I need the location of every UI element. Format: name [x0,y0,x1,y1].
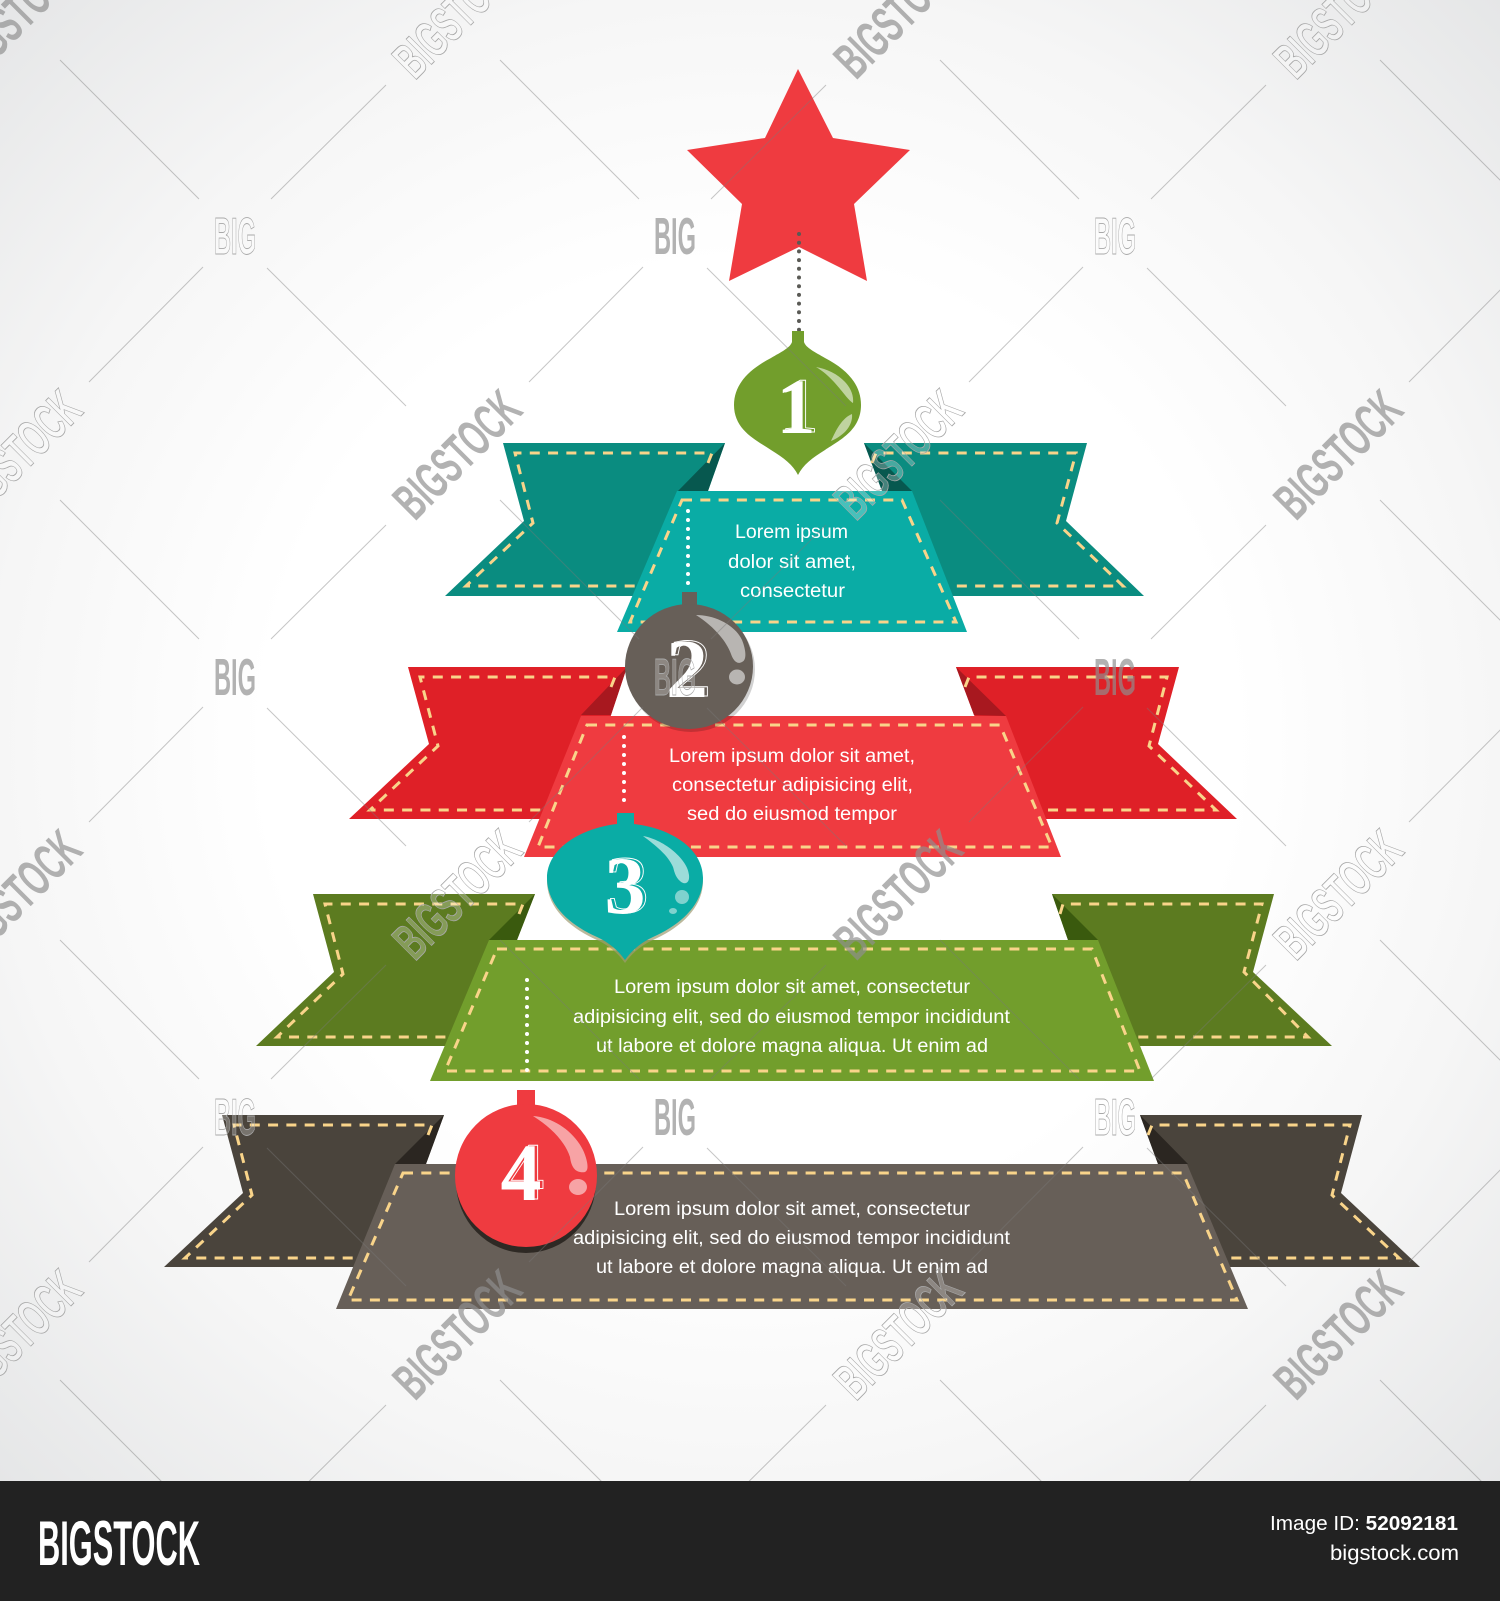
ribbon 3 right tail [1052,894,1332,1046]
ribbon 2 left tail [349,667,627,819]
watermark text: BIGSTOCK [823,1260,974,1410]
ribbon 2 right tail [956,667,1237,819]
ribbon 1 left tail [445,443,725,596]
ribbon 1 right tail [864,443,1144,596]
ornament 2: grey: 2 [669,622,711,715]
ribbon 4 centre panel: Lorem ipsum dolor sit amet, consectetur [614,1199,971,1220]
watermark text: BIG [214,1089,256,1147]
watermark text: BIGSTOCK [382,1260,533,1410]
watermark text: BIGSTOCK [382,820,533,970]
ribbon 3 left tail [256,894,535,1046]
ribbon 2 centre panel: Lorem ipsum dolor sit amet, [669,746,915,767]
ornament 2: grey [625,592,755,732]
ribbon 4 centre panel [336,1164,1248,1309]
ribbon 2 centre panel: sed do eiusmod tempor [687,804,898,825]
ribbon 1 centre panel [617,491,967,632]
watermark text: BIG [1094,1089,1136,1147]
ribbon 3 centre panel: Lorem ipsum dolor sit amet, consectetur [614,977,971,998]
watermark text: BIGSTOCK [823,380,974,530]
dotted string: star to ornament 1 [797,234,801,330]
footer bar: BIGSTOCK [38,1509,200,1579]
ribbon 2 centre panel [524,716,1061,857]
image id: Image ID: 52092181 [1270,1512,1458,1535]
ribbon 4 centre panel: ut labore et dolore magna aliqua. Ut enim ad [596,1257,988,1278]
ribbon 2: red [349,667,1237,857]
ribbon 1 centre panel: Lorem ipsum [735,522,848,543]
ribbon 3 centre panel [430,940,1154,1081]
watermark text: BIG [1094,208,1136,266]
ribbon 3 centre panel: adipisicing elit, sed do eiusmod tempor incididunt [573,1007,1011,1028]
ribbon 3: green [256,894,1332,1081]
ornament 1: green [734,331,861,475]
ornament 2: grey: 2 [666,623,708,716]
ribbon 4 right tail [1140,1115,1420,1267]
footer site name: bigstock.com [1330,1542,1459,1565]
watermark text: BIG [214,649,256,707]
star [687,69,910,281]
ornament 1: green: 1 [776,363,816,450]
ornament 3: teal: 3 [604,840,646,931]
ribbon 1 centre panel: dolor sit amet, [728,552,856,573]
watermark text: BIGSTOCK [382,380,533,530]
watermark text: BIGSTOCK [1263,820,1414,970]
watermark text: BIGSTOCK [1263,1260,1414,1410]
watermark text: BIG [654,208,696,266]
ornament 3: teal: 3 [608,839,648,930]
ornament 4: red: 4 [504,1126,544,1217]
ribbon 4 centre panel: adipisicing elit, sed do eiusmod tempor incididunt [573,1228,1011,1249]
ornament 4: red [455,1090,597,1253]
ribbon 3 centre panel: ut labore et dolore magna aliqua. Ut enim ad [596,1036,988,1057]
watermark text: BIGSTOCK [823,820,974,970]
watermark text: BIG [214,208,256,266]
ribbon 1 centre panel: consectetur [740,581,846,602]
watermark text: BIG [654,1089,696,1147]
watermark text: BIG [654,649,696,707]
ornament 3: teal [547,813,703,963]
watermark text: BIG [1094,649,1136,707]
ornament 4: red: 4 [500,1127,542,1218]
ribbon 1: teal [445,443,1144,632]
ribbon 4: dark grey [164,1115,1420,1309]
ornament 1: green: 1 [780,362,818,449]
ribbon 2 centre panel: consectetur adipisicing elit, [672,775,913,796]
footer bar [0,1481,1500,1601]
ribbon 4 left tail [164,1115,444,1267]
watermark text: BIGSTOCK [1263,380,1414,530]
